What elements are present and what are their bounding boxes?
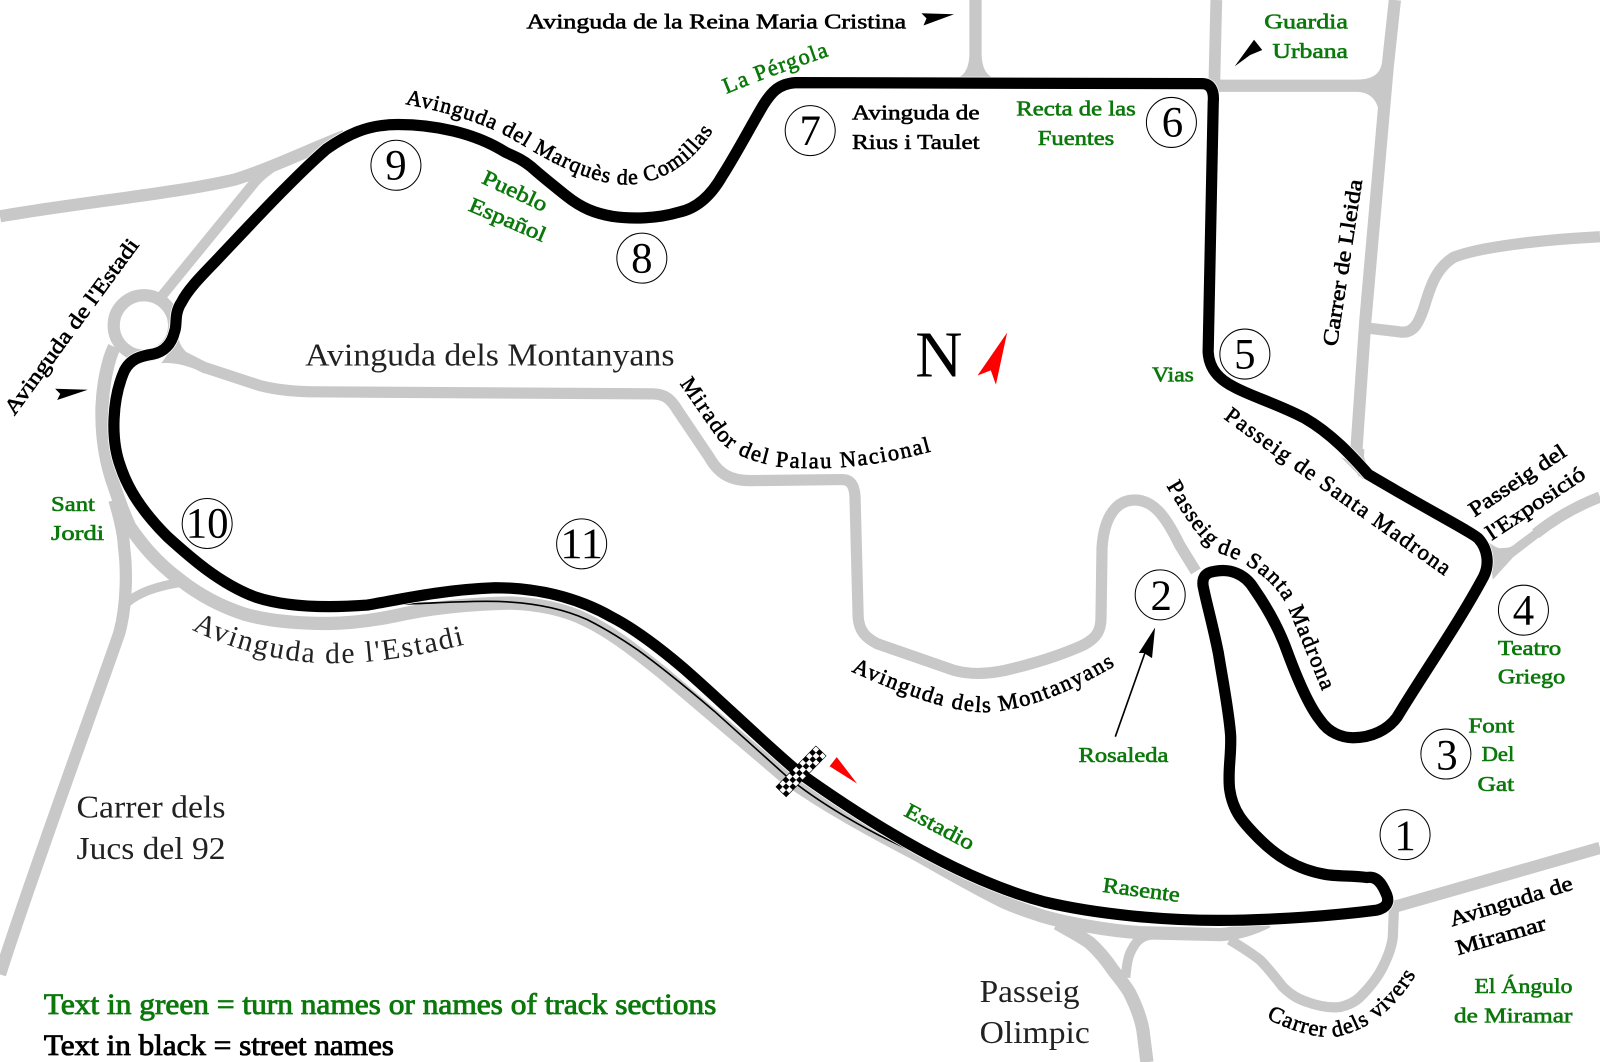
turn 1 <box>1380 810 1430 860</box>
street label: Carrer dels Jucs del 92: Carrer dels <box>77 789 226 824</box>
turn 11: 11 <box>560 521 603 568</box>
section label: La Pergola: La Pérgola <box>721 45 830 94</box>
turn 8: 8 <box>631 235 653 282</box>
section label: Rasente: Rasente <box>1101 873 1181 907</box>
turn 5 <box>1220 329 1270 379</box>
street label: Avinguda de l'Estadi (rotated): Avinguda de l'Estadi <box>0 234 144 419</box>
legend: black text: Text in black = street names <box>44 1030 394 1062</box>
section label: Teatro Griego: Griego <box>1498 665 1565 689</box>
section label: Font Del Gat: Gat <box>1478 772 1514 796</box>
street label: Avinguda de Miramar: Miramar <box>1453 911 1549 960</box>
street label: Carrer dels Jucs del 92 <box>77 789 226 866</box>
turn 10: 10 <box>186 501 229 548</box>
street label: Passeig de Santa Madrona (upper): Passeig de Santa Madrona <box>1224 406 1448 576</box>
turn 3 <box>1421 729 1471 779</box>
section label: Pueblo Espanol: Español <box>465 193 550 247</box>
street label: Avinguda dels Montanyans (lower): Avinguda dels Montanyans <box>851 657 1114 713</box>
section label: Sant Jordi <box>51 492 104 545</box>
turn 2: 2 <box>1150 573 1172 620</box>
street label: Passeig del l'Exposicio: Passeig del <box>1464 439 1571 521</box>
turn 5: 5 <box>1234 331 1256 378</box>
section label: Pueblo Espanol <box>465 165 552 247</box>
turn 7 <box>785 106 835 156</box>
street label: Mirador del Palau Nacional: Mirador del Palau Nacional <box>680 375 932 469</box>
turn 9 <box>371 140 421 190</box>
street label: Passeig Olimpic: Passeig <box>980 974 1080 1009</box>
section label: Recta de las Fuentes <box>1016 96 1136 150</box>
compass red arrow <box>978 333 1007 385</box>
arrow: Reina Maria Cristina <box>921 13 954 26</box>
street label: Passeig Olimpic <box>980 974 1090 1050</box>
street label: Avinguda de Rius i Taulet: Rius i Taulet <box>852 130 980 154</box>
street label: Avinguda del Marques de Comillas: Avinguda del Marquès de Comillas <box>405 90 712 185</box>
turn 3: 3 <box>1436 732 1458 779</box>
red direction flag at start <box>830 757 857 784</box>
street label: Avinguda dels Montanyans (large): Avinguda dels Montanyans <box>305 337 674 372</box>
section label: Font Del Gat: Del <box>1482 742 1514 766</box>
street label: Passeig Olimpic: Olimpic <box>980 1015 1090 1050</box>
section label: El Angulo de Miramar: de Miramar <box>1454 1003 1572 1027</box>
turn 4 <box>1498 585 1548 635</box>
turn 6: 6 <box>1162 100 1183 147</box>
legend <box>44 989 716 1062</box>
turn 4: 4 <box>1513 587 1534 634</box>
street label: Carrer dels vivers: Carrer dels vivers <box>1269 970 1415 1037</box>
racing track <box>114 83 1487 920</box>
section label: Guardia Urbana: Urbana <box>1272 39 1349 63</box>
street label: Avinguda de Rius i Taulet: Avinguda de <box>852 100 980 124</box>
section label: El Angulo de Miramar: El Ángulo <box>1474 974 1572 998</box>
turn 8 <box>617 233 667 283</box>
section label: Guardia Urbana <box>1264 10 1349 63</box>
section label: Estadio: Estadio <box>901 798 979 855</box>
turn 2 <box>1135 570 1185 620</box>
section label: Sant Jordi: Jordi <box>51 521 104 545</box>
turn 9: 9 <box>385 143 407 190</box>
section label: Teatro Griego <box>1498 636 1565 689</box>
street label: Avinguda de la Reina Maria Cristina: Avinguda de la Reina Maria Cristina <box>527 10 907 34</box>
section label: Recta de las Fuentes: Fuentes <box>1038 126 1114 150</box>
street label: Avinguda de Miramar: Avinguda de <box>1446 871 1575 931</box>
street label: Avinguda de Miramar <box>1446 871 1575 960</box>
street label: Passeig del l'Exposicio <box>1464 439 1590 545</box>
arrow: Guardia Urbana <box>1235 40 1262 66</box>
section label: Vias: Vias <box>1152 363 1194 387</box>
street label: Carrer dels Jucs del 92: Jucs del 92 <box>77 831 226 866</box>
section label: Font Del Gat: Font <box>1468 714 1514 738</box>
street label: Passeig del l'Exposicio: l'Exposició <box>1481 462 1590 545</box>
street label: Avinguda de Rius i Taulet <box>852 100 980 154</box>
section label: Pueblo Espanol: Pueblo <box>479 165 552 217</box>
legend: green text: Text in green = turn names or names of track sections <box>44 989 716 1021</box>
chequered start line <box>776 746 826 797</box>
section label: Guardia Urbana: Guardia <box>1264 10 1349 34</box>
turn 6 <box>1146 97 1196 147</box>
section label: Teatro Griego: Teatro <box>1498 636 1561 660</box>
arrow: Avinguda de l'Estadi <box>55 389 88 400</box>
street label: Passeig de Santa Madrona (lower): Passeig de Santa Madrona <box>1166 478 1331 692</box>
thin inner line <box>403 601 912 851</box>
arrow: Rosaleda to turn 2 <box>1115 628 1155 737</box>
section label: Rosaleda: Rosaleda <box>1079 743 1169 767</box>
compass N: N <box>915 320 962 392</box>
section label: Font Del Gat <box>1468 714 1514 796</box>
turn 7: 7 <box>799 108 821 155</box>
section label: Sant Jordi: Sant <box>51 492 95 516</box>
turn 1: 1 <box>1394 813 1416 860</box>
section label: Recta de las Fuentes: Recta de las <box>1016 96 1136 120</box>
section label: El Angulo de Miramar <box>1454 974 1572 1027</box>
street label: Carrer de Lleida: Carrer de Lleida <box>1318 177 1367 348</box>
street label: Avinguda de l'Estadi (large): Avinguda de l'Estadi <box>192 616 464 664</box>
